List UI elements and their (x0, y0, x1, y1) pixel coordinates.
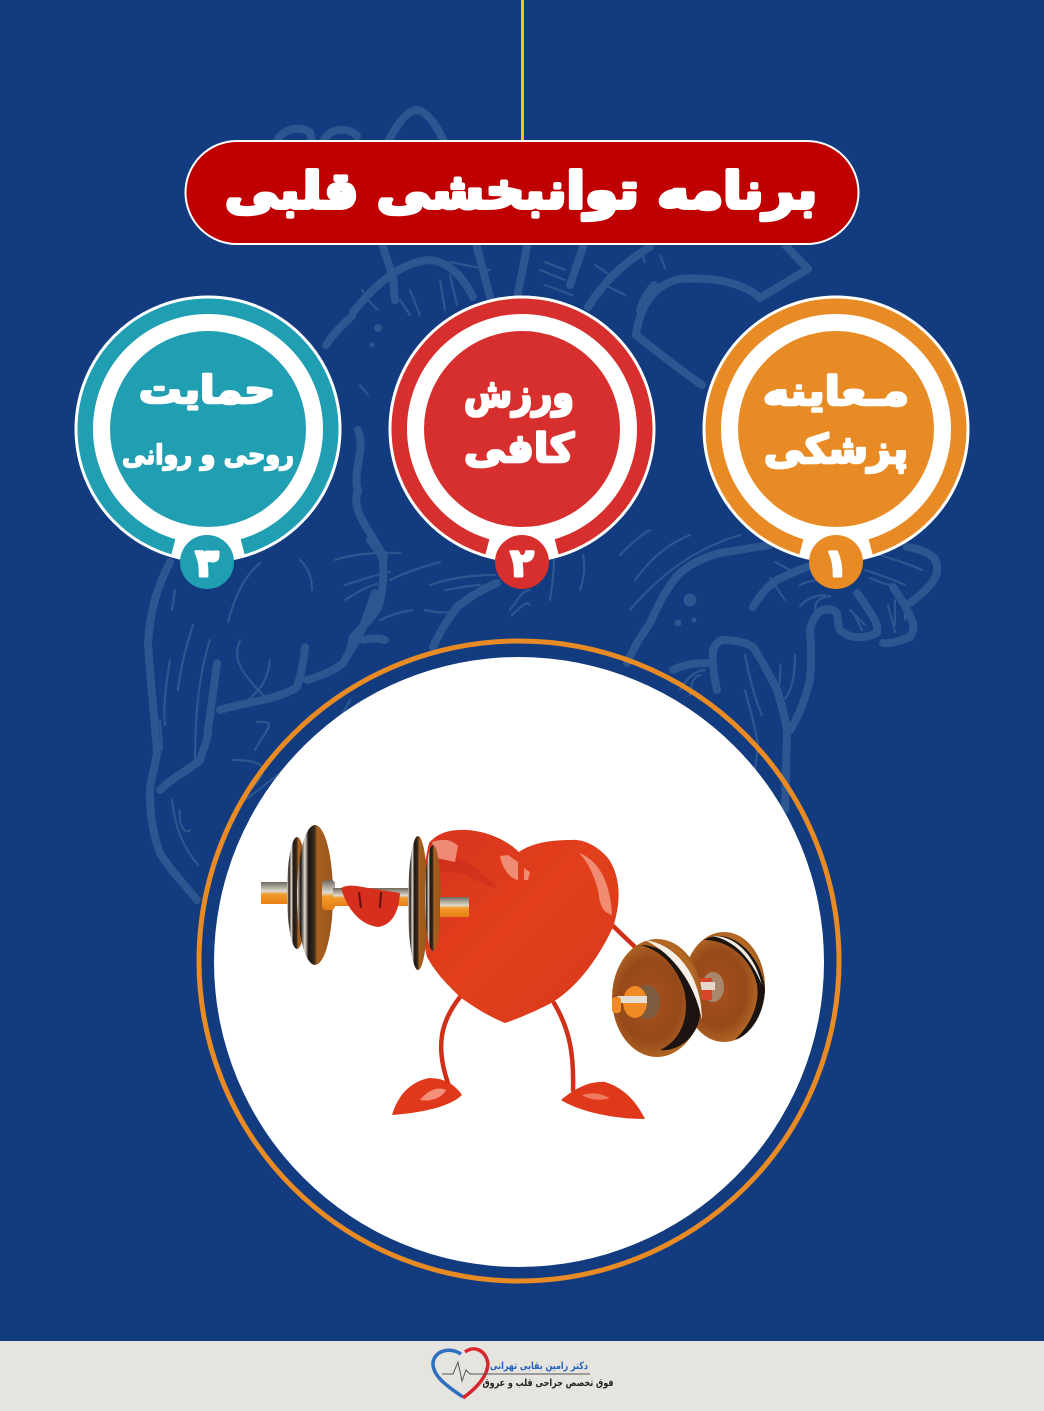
footer logo (433, 1349, 614, 1398)
left dumbbell front (408, 836, 469, 970)
front hub (634, 985, 660, 1019)
logo text: دکتر رامین بقایی تهرانی (490, 1361, 588, 1372)
step 1: medical examination (704, 297, 968, 589)
background heart line drawing (148, 110, 937, 900)
footer logo: فوق تخصص جراحی قلب و عروق (482, 1378, 614, 1389)
step 1: medical examination: پزشکی (764, 427, 908, 473)
rear hub (702, 972, 724, 1002)
step 2: sufficient exercise (390, 297, 654, 589)
left dumbbell rear (261, 825, 418, 965)
right dumbbell (612, 932, 765, 1057)
step 3: emotional support (76, 297, 340, 589)
front plate (612, 939, 702, 1057)
rear plate (683, 932, 765, 1042)
step 3: emotional support: حمایت (139, 368, 275, 412)
step 3: emotional support: روحی و روانی (122, 440, 294, 471)
top connector line (521, 0, 524, 141)
title text: برنامه توانبخشی قلبی (225, 162, 817, 221)
title banner (186, 141, 858, 244)
heart body (422, 830, 619, 1023)
step 2: sufficient exercise: ۲ (510, 541, 534, 585)
footer bar (0, 1341, 1044, 1411)
step 3: emotional support: ۳ (195, 541, 219, 585)
feet (392, 1078, 645, 1119)
step 2: sufficient exercise: ورزش (464, 371, 574, 417)
step 2: sufficient exercise: کافی (464, 426, 575, 472)
logo heart (433, 1350, 463, 1397)
illustration: heart lifting dumbbells (261, 825, 765, 1119)
heart shine (432, 840, 612, 915)
step 1: medical examination: مـعاینه (763, 369, 909, 415)
image circle (199, 641, 839, 1281)
step 1: medical examination: ۱ (824, 541, 848, 585)
legs and arm (441, 925, 634, 1090)
